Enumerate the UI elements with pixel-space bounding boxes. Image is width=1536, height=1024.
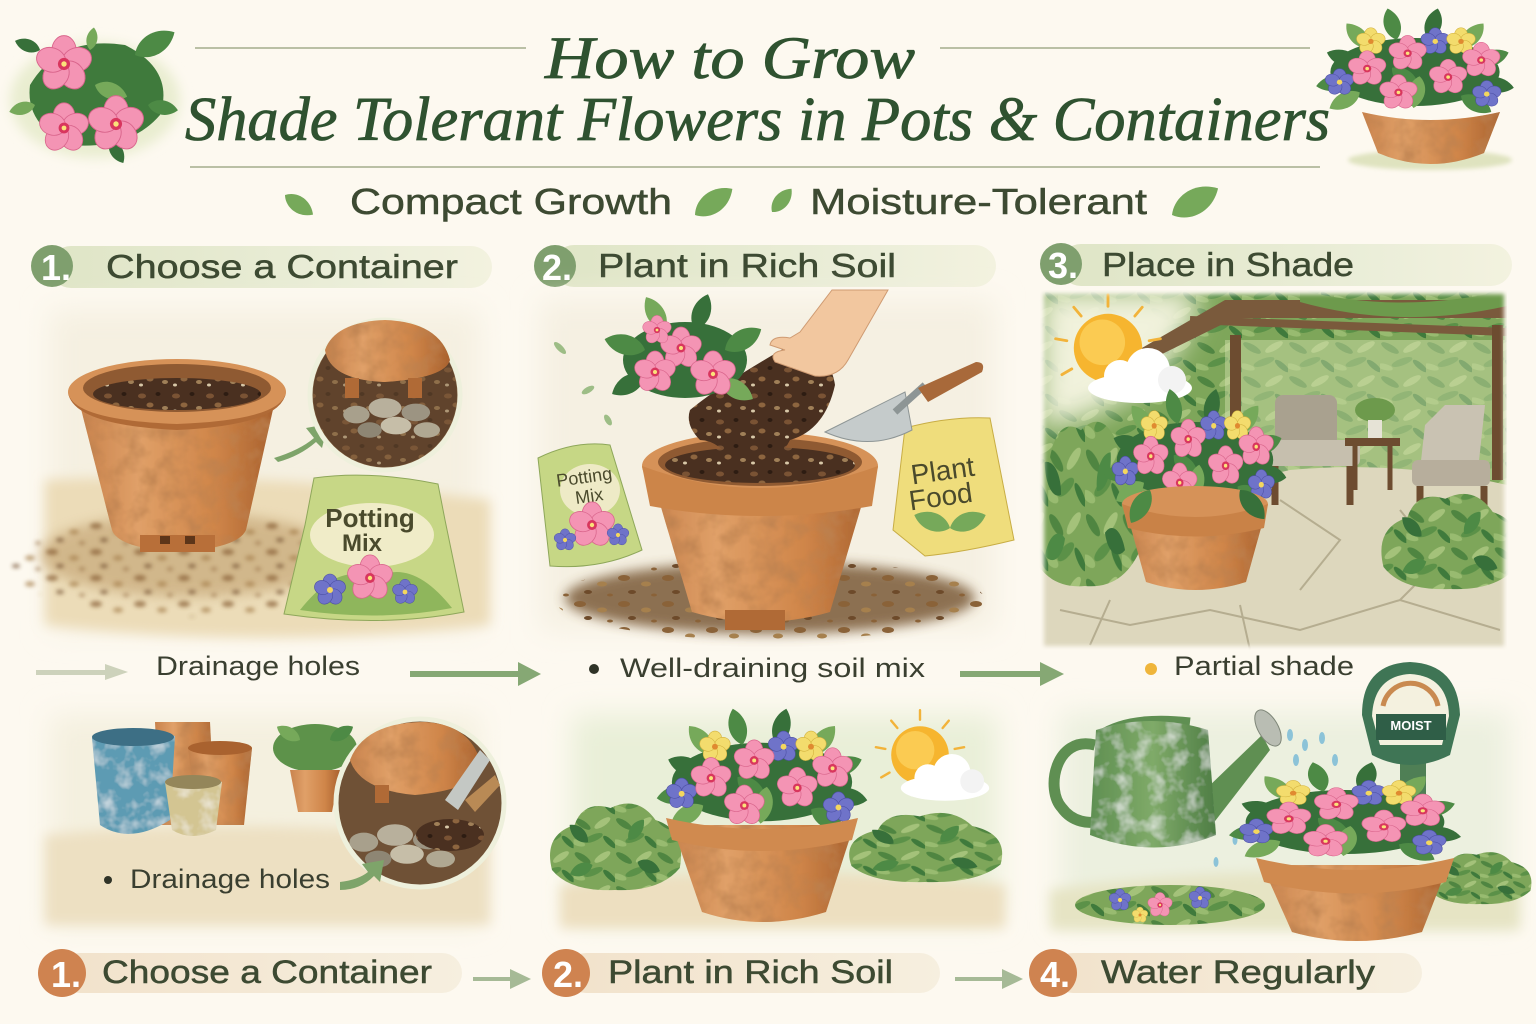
heading: bottom step 1: Choose a Container: [102, 954, 432, 990]
arrow: bottom 1 to 2: [473, 969, 531, 989]
heading: step 1 choose a container: 1.: [41, 247, 71, 288]
moisture meter: MOIST: [1390, 718, 1432, 733]
pots group: [92, 722, 252, 836]
heading: bottom step 2: Plant in Rich Soil: [608, 954, 893, 990]
bag: plant food: Food: [907, 477, 974, 516]
bag: potting mix: Mix: [342, 530, 383, 557]
heading: bottom step 2: 2.: [553, 954, 583, 995]
panel: planted container: [550, 707, 1005, 928]
sun and cloud: [1056, 295, 1192, 403]
pergola: [1135, 290, 1507, 480]
bag: potting mix small: [538, 444, 642, 567]
root ball: [689, 345, 835, 470]
heading: step 1 choose a container: [31, 245, 492, 288]
watering can: [1054, 706, 1287, 848]
panel: place in shade illustration: [1027, 290, 1520, 650]
shrubs left: [1041, 422, 1142, 586]
heading: bottom step 4: Water Regularly: [1101, 954, 1375, 990]
title: [185, 25, 1330, 167]
bag: plant food: Plant: [909, 451, 977, 490]
heading: bottom step 2: [542, 949, 940, 997]
potted flowers: [1227, 760, 1463, 941]
heading: step 2 plant in rich soil: 2.: [542, 247, 572, 288]
heading: step 2 plant in rich soil: [534, 245, 996, 288]
furniture: [1268, 395, 1490, 512]
heading: step 2 plant in rich soil: Plant in Rich Soil: [598, 247, 896, 284]
subtitle: compact growth: [280, 180, 739, 224]
icon: top-right flower pot: [1315, 7, 1515, 170]
moisture meter: [1362, 662, 1460, 805]
bag: potting mix small: Mix: [574, 484, 604, 508]
label: partial shade: Partial shade: [1174, 651, 1354, 681]
falling leaves: [552, 340, 614, 427]
trowel: [825, 362, 983, 442]
bag: potting mix small: Potting: [555, 463, 613, 491]
row: drainage holes label: Drainage holes: [156, 651, 360, 681]
bag: plant food: [893, 418, 1014, 556]
heading: bottom step 4: 4.: [1040, 954, 1070, 995]
ground flowers: [1075, 885, 1265, 925]
subtitle: moisture tolerant: [766, 177, 1224, 226]
potted plant: [1102, 387, 1288, 590]
sun and cloud: [876, 710, 989, 801]
small potted plant: [273, 721, 357, 812]
hand: [770, 290, 888, 376]
subtitle: moisture tolerant: Moisture-Tolerant: [810, 181, 1147, 222]
panel: watering: [1050, 662, 1531, 941]
label: drainage holes: Drainage holes: [130, 864, 330, 894]
large pot: [642, 432, 878, 630]
panel: plant in rich soil illustration: [538, 290, 1014, 640]
icon: top-left flower cluster: [8, 23, 180, 166]
shrubs right: [1381, 494, 1520, 589]
heading: step 3 place in shade: 3.: [1048, 245, 1078, 286]
label: well-draining soil mix: Well-draining soil mix: [620, 653, 926, 683]
panel: containers and drainage: [45, 715, 504, 925]
heading: bottom step 4: [1029, 949, 1422, 997]
arrow: bottom 2 to 4: [955, 969, 1023, 989]
title: How to Grow: [544, 25, 915, 91]
heading: step 1 choose a container: Choose a Container: [106, 248, 458, 285]
plant: [602, 291, 766, 407]
subtitle: compact growth: Compact Growth: [350, 181, 672, 222]
arrow to inset: [340, 860, 384, 890]
heading: bottom step 1: 1.: [51, 954, 81, 995]
heading: step 3 place in shade: Place in Shade: [1102, 246, 1354, 283]
water drops: [1214, 729, 1338, 867]
terracotta pot with drainage feet: [68, 359, 286, 552]
heading: step 3 place in shade: [1040, 243, 1512, 286]
arrow: step 1 to 2: [410, 662, 541, 686]
arrow: step 2 to 3: [960, 662, 1064, 686]
bag: potting mix: Potting: [325, 503, 415, 533]
inset: pot feet on stones: [310, 320, 460, 470]
inset: pot on stones: [336, 719, 504, 887]
patio ground: [1040, 467, 1507, 650]
arrow to inset: [274, 424, 328, 462]
panel: choose a container illustration: [10, 310, 490, 638]
heading: bottom step 1: [38, 949, 462, 997]
row: drainage holes label: [36, 651, 360, 681]
potted flowers: [655, 707, 869, 922]
title: Shade Tolerant Flowers in Pots & Containers: [185, 86, 1330, 154]
bag: potting mix: [284, 475, 464, 621]
